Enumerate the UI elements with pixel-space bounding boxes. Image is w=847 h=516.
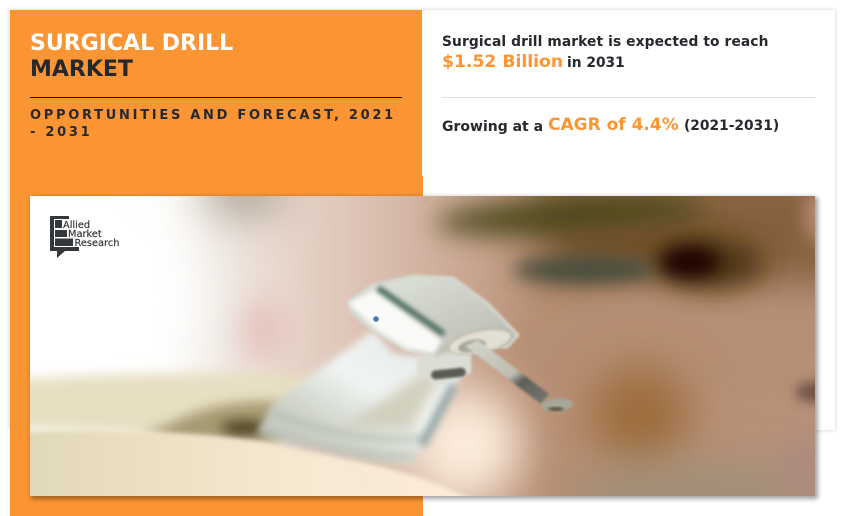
text: CAGR statement: CAGR of 4.4% xyxy=(548,115,679,135)
photo: surgical drill close-up xyxy=(28,194,821,502)
logo mark xyxy=(50,216,79,258)
text: CAGR statement: Growing at a xyxy=(442,119,543,135)
logo text: Research xyxy=(74,238,119,249)
subheading: forecast period xyxy=(30,108,396,140)
text: market size statement: Surgical drill market is expected to reach xyxy=(442,34,769,50)
neck collar xyxy=(418,350,470,384)
collar slot xyxy=(431,367,466,380)
head dark stripe xyxy=(378,288,444,334)
orange lower extension xyxy=(10,176,423,516)
blue dot xyxy=(373,316,379,322)
pink blush xyxy=(240,300,284,360)
right face tones xyxy=(540,170,847,285)
heading: title xyxy=(30,31,233,82)
drill shaft xyxy=(465,340,549,404)
eyebrow xyxy=(434,191,706,241)
drill handpiece xyxy=(257,276,574,464)
title divider xyxy=(30,97,402,98)
drill tip xyxy=(540,397,574,413)
head ring xyxy=(449,330,512,356)
eye xyxy=(655,238,765,290)
text: market size statement: $1.52 Billion xyxy=(442,52,563,72)
text: market size statement: in 2031 xyxy=(567,55,625,71)
text: CAGR statement: (2021-2031) xyxy=(684,118,779,134)
body warm reflection xyxy=(345,372,440,430)
logo: Allied Market Research xyxy=(50,216,119,258)
logo text: Allied xyxy=(63,220,90,231)
head highlight band xyxy=(349,291,442,354)
logo text: Market xyxy=(68,229,102,240)
logo text xyxy=(63,220,119,249)
text: CAGR statement xyxy=(442,115,779,135)
body rings xyxy=(262,412,424,456)
card background xyxy=(10,10,835,430)
grey haze near top xyxy=(205,165,285,215)
text: market size statement xyxy=(442,34,769,72)
drill head xyxy=(348,276,518,357)
photo backdrop xyxy=(30,196,815,496)
subheading: forecast period: - 2031 xyxy=(30,125,92,140)
subheading: forecast period: OPPORTUNITIES AND FORECAST, 2021 xyxy=(30,108,396,123)
statement divider xyxy=(442,97,815,98)
lower hand band xyxy=(30,429,468,496)
heading: title: SURGICAL DRILL xyxy=(30,31,233,56)
forearm band xyxy=(30,367,298,434)
heading: title: MARKET xyxy=(30,57,133,82)
white blur top left xyxy=(164,245,210,355)
panel: orange title block xyxy=(10,10,422,516)
drill body xyxy=(257,330,470,464)
photo shadow xyxy=(31,197,818,499)
body blue edge xyxy=(422,385,454,445)
logo bars xyxy=(55,220,73,246)
